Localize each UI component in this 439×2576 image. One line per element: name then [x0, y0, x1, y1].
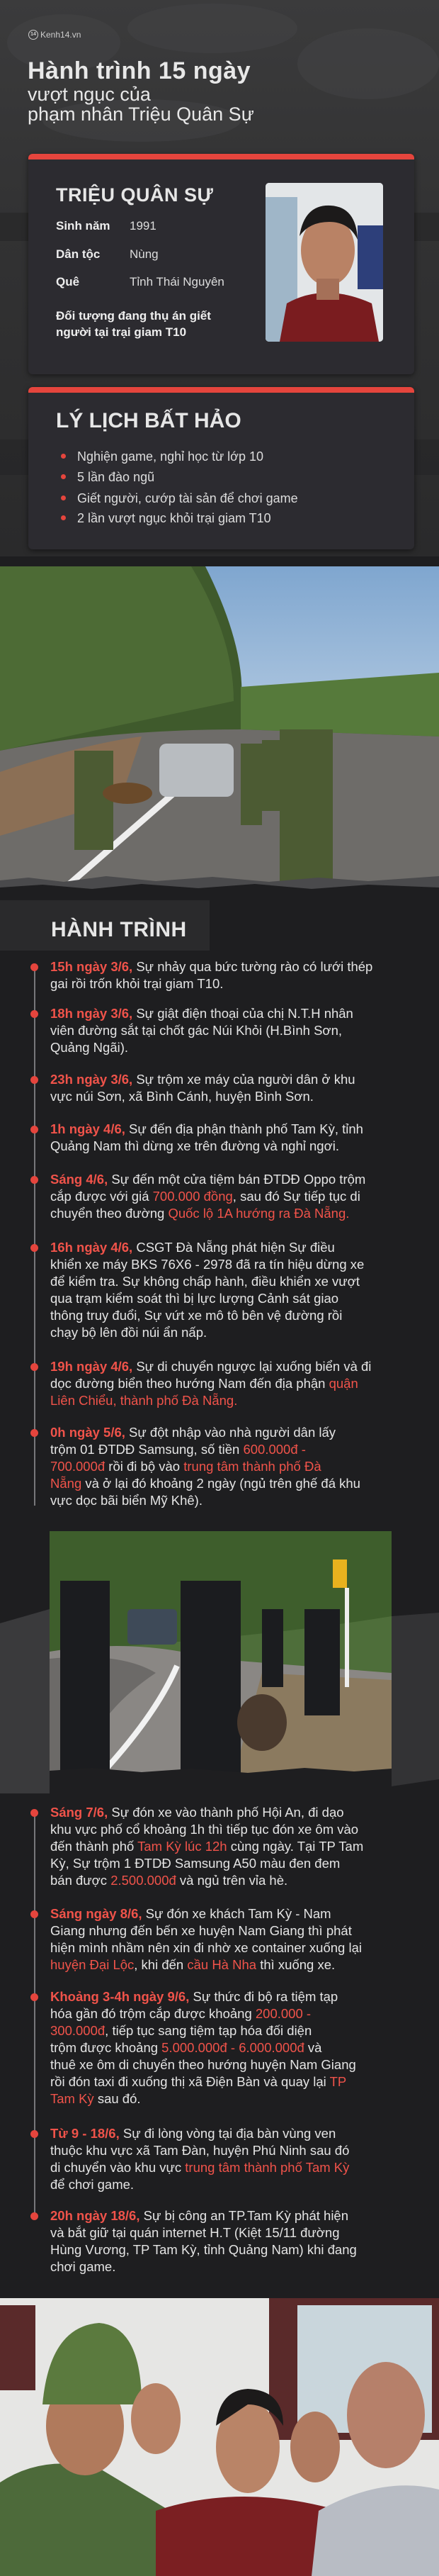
entry 16h 4/6: chạy bộ lên đồi núi ẩn nấp.	[50, 1325, 207, 1340]
entry 16h 4/6: để kiểm tra. Sự không chấp hành, điều khiển xe vượt	[50, 1274, 360, 1289]
timeline part 1	[34, 971, 35, 1506]
entry 16h 4/6: thông truy đuổi, Sự vứt xe mô tô bên vệ đường rồi	[50, 1308, 342, 1323]
entry 9/6: Tam Kỳ sau đó.	[50, 2091, 141, 2106]
logo: Kenh14.vn	[40, 30, 81, 40]
entry 20h 18/6	[50, 2208, 357, 2274]
heading: HÀNH TRÌNH: HÀNH TRÌNH	[51, 918, 187, 941]
entry 23h 3/6: vực núi Sơn, xã Bình Cánh, huyện Bình Sơn.	[50, 1089, 314, 1104]
profile details: người tại trại giam T10	[56, 325, 186, 339]
entry sáng 7/6: khu vực phố cổ khoảng 1h thì tiếp tục đón xe ôm vào	[50, 1822, 358, 1837]
entry 9-18/6: Từ 9 - 18/6, Sự đi lòng vòng tại địa bàn vùng ven	[50, 2126, 336, 2141]
entry 18h 3/6: 18h ngày 3/6, Sự giật điện thoại của chị N.T.H nhân	[50, 1006, 353, 1021]
entry 19h 4/6	[50, 1359, 371, 1408]
title	[28, 57, 254, 125]
entry 23h 3/6	[50, 1072, 355, 1104]
entry 1h 4/6: 1h ngày 4/6, Sự đến địa phận thành phố Tam Kỳ, tỉnh	[50, 1121, 363, 1136]
panel: bad record	[28, 387, 414, 549]
entry 9/6: hóa gần đó trộm cắp được khoảng 200.000 -	[50, 2006, 311, 2021]
entry sáng 4/6: chuyển theo đường Quốc lộ 1A hướng ra Đà Nẵng.	[50, 1206, 349, 1221]
entry sáng 4/6	[50, 1172, 365, 1221]
profile details: Quê	[56, 275, 79, 289]
entry 15h 3/6: gai rồi trốn khỏi trại giam T10.	[50, 976, 223, 991]
profile name: TRIỆU QUÂN SỰ	[56, 184, 213, 206]
panel: profile card	[28, 154, 414, 374]
entry sáng 8/6: Sáng ngày 8/6, Sự đón xe khách Tam Kỳ - Nam	[50, 1906, 331, 1921]
entry 0h 5/6: trộm 01 ĐTDĐ Samsung, số tiền 600.000đ -	[50, 1442, 306, 1457]
entry 9-18/6: thuộc khu vực xã Tam Đàn, huyện Phú Ninh sau đó	[50, 2143, 349, 2158]
profile details	[56, 219, 224, 339]
entry 9/6: thuê xe ôm di chuyển theo hướng huyện Nam Giang	[50, 2057, 356, 2072]
heading background block	[0, 900, 210, 951]
entry 9/6: Khoảng 3-4h ngày 9/6, Sự thức đi bộ ra tiệm tạp	[50, 1989, 338, 2004]
entry 9-18/6: di chuyển vào khu vực trung tâm thành phố Tam Kỳ	[50, 2160, 349, 2175]
entry 19h 4/6: dọc đường biển theo hướng Nam đến địa phận quận	[50, 1376, 358, 1391]
entry sáng 8/6: hiện mình nhầm nên xin đi nhờ xe container xuống lại	[50, 1940, 362, 1955]
title: phạm nhân Triệu Quân Sự	[28, 103, 254, 125]
entry 9/6	[50, 1989, 356, 2106]
bad record list: 2 lần vượt ngục khỏi trại giam T10	[77, 511, 271, 525]
entry 20h 18/6: 20h ngày 18/6, Sự bị công an TP.Tam Kỳ phát hiện	[50, 2208, 348, 2223]
entry sáng 4/6: cắp được với giá 700.000 đồng, sau đó Sự tiếp tục di	[50, 1189, 360, 1204]
logo: 14	[30, 32, 36, 37]
entry 19h 4/6: Liên Chiểu, thành phố Đà Nẵng.	[50, 1393, 237, 1408]
torn paper edge	[0, 876, 439, 889]
entry 20h 18/6: chơi game.	[50, 2259, 115, 2274]
entry sáng 4/6: Sáng 4/6, Sự đến một cửa tiệm bán ĐTDĐ Oppo trộm	[50, 1172, 365, 1187]
entry 19h 4/6: 19h ngày 4/6, Sự di chuyển ngược lại xuống biển và đi	[50, 1359, 371, 1374]
entry 16h 4/6: khiển xe máy BKS 76X6 - 2978 đã ra tín hiệu dừng xe	[50, 1257, 364, 1272]
timeline part 2	[34, 1816, 35, 2213]
bad record list: 5 lần đào ngũ	[77, 470, 154, 484]
title: Hành trình 15 ngày	[28, 57, 251, 84]
bad record heading: LÝ LỊCH BẤT HẢO	[56, 409, 241, 432]
entry 9/6: trộm được khoảng 5.000.000đ - 6.000.000đ và	[50, 2040, 321, 2055]
entry 20h 18/6: và bắt giữ tại quán internet H.T (Kiệt 15/11 đường	[50, 2225, 340, 2240]
profile details: Tỉnh Thái Nguyên	[130, 275, 224, 289]
entry 1h 4/6: Quảng Nam thì dừng xe trên đường và nghỉ ngơi.	[50, 1138, 339, 1153]
entry 16h 4/6: 16h ngày 4/6, CSGT Đà Nẵng phát hiện Sự điều	[50, 1240, 335, 1255]
profile details: Đối tượng đang thụ án giết	[56, 309, 211, 323]
entry 18h 3/6: Quảng Ngãi).	[50, 1040, 128, 1055]
entry 15h 3/6: 15h ngày 3/6, Sự nhảy qua bức tường rào có lưới thép	[50, 959, 372, 974]
entry 15h 3/6	[50, 959, 372, 991]
entry sáng 8/6: Giang nhưng đến bến xe huyện Nam Giang thì phát	[50, 1923, 352, 1938]
photo: police with dogs	[50, 1531, 392, 1773]
entry 18h 3/6	[50, 1006, 353, 1055]
entry 9-18/6: để chơi game.	[50, 2177, 134, 2192]
entry 0h 5/6: Nẵng và ở lại đó khoảng 2 ngày (ngủ trên ghế đá khu	[50, 1476, 360, 1491]
entry 1h 4/6	[50, 1121, 363, 1153]
entry sáng 7/6	[50, 1805, 363, 1888]
entry sáng 7/6: bán được 2.500.000đ và ngủ trên vỉa hè.	[50, 1873, 287, 1888]
entry 20h 18/6: Hùng Vương, TP Tam Kỳ, tỉnh Quảng Nam) khi đang	[50, 2242, 357, 2257]
torn paper decorations	[0, 1609, 439, 1793]
entry 23h 3/6: 23h ngày 3/6, Sự trộm xe máy của người dân ở khu	[50, 1072, 355, 1087]
title: vượt ngục của	[28, 84, 151, 105]
entry 9-18/6	[50, 2126, 350, 2192]
entry 0h 5/6: 700.000đ rồi đi bộ vào trung tâm thành phố Đà	[50, 1459, 321, 1474]
photo: soldiers on road	[0, 566, 439, 882]
entry 9/6: rồi đón taxi đi xuống thị xã Điện Bàn và quay lại TP	[50, 2074, 346, 2089]
entry 16h 4/6: qua trạm kiểm soát thì bị lực lượng Cảnh sát giao	[50, 1291, 338, 1306]
entry sáng 7/6: Sáng 7/6, Sự đón xe vào thành phố Hội An, đi dạo	[50, 1805, 344, 1820]
entry sáng 8/6	[50, 1906, 362, 1972]
bad record list	[61, 449, 298, 525]
profile details: 1991	[130, 219, 156, 233]
bad record list: Nghiện game, nghỉ học từ lớp 10	[77, 449, 263, 464]
entry 9/6: 300.000đ, tiếp tục sang tiệm tạp hóa đối diện	[50, 2023, 312, 2038]
entry 0h 5/6: 0h ngày 5/6, Sự đột nhập vào nhà người dân lấy	[50, 1425, 336, 1440]
entry sáng 8/6: huyện Đại Lộc, khi đến cầu Hà Nha thì xuống xe.	[50, 1957, 335, 1972]
top header background	[0, 0, 439, 556]
entry sáng 7/6: Kỳ, Sự trộm 1 ĐTDĐ Samsung A50 màu đen đem	[50, 1856, 340, 1871]
entry 0h 5/6: vực dọc bãi biển Mỹ Khê).	[50, 1493, 203, 1508]
entry 16h 4/6	[50, 1240, 364, 1340]
bad record list: Giết người, cướp tài sản để chơi game	[77, 491, 298, 505]
profile details: Sinh năm	[56, 219, 110, 233]
profile details: Nùng	[130, 247, 159, 261]
profile details: Dân tộc	[56, 247, 100, 261]
photo: portrait	[266, 183, 383, 342]
entry sáng 7/6: đến thành phố Tam Kỳ lúc 12h cùng ngày. Tại TP Tam	[50, 1839, 363, 1854]
photo: arrest	[0, 2298, 439, 2576]
entry 18h 3/6: viên đường sắt tại chốt gác Núi Khỏi (H.Bình Sơn,	[50, 1023, 342, 1038]
entry 0h 5/6	[50, 1425, 360, 1508]
